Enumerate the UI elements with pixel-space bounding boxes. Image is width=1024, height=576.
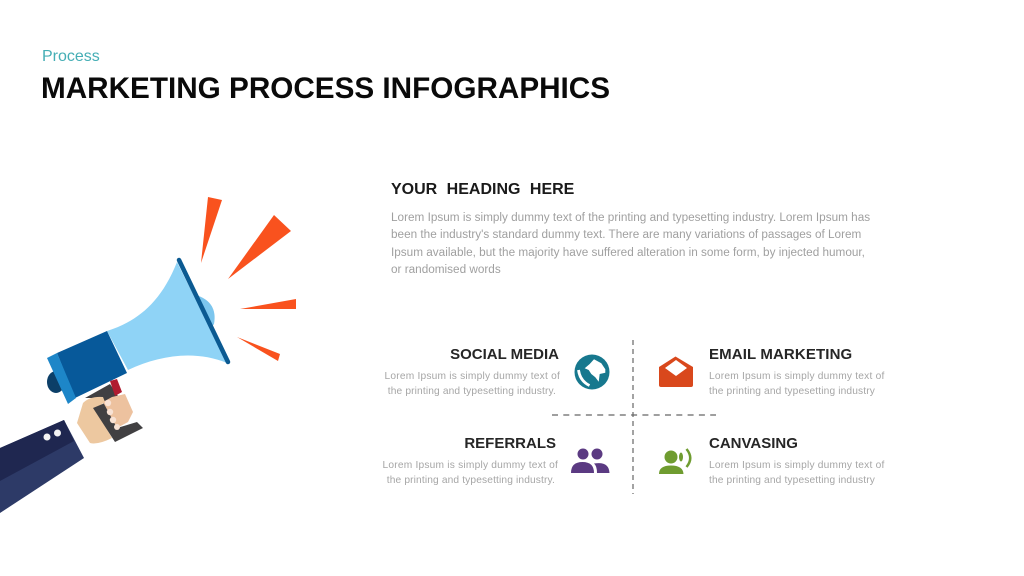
description: social media: the printing and typesetting industry. (388, 386, 556, 397)
subtitle: Process (42, 48, 100, 65)
description: email marketing: Lorem Ipsum is simply dummy text of (709, 371, 884, 382)
body paragraph: been the industry's standard dummy text. There are many variations of passages of Lorem (391, 228, 861, 241)
description: referrals: Lorem Ipsum is simply dummy text of (382, 460, 558, 471)
megaphone (47, 260, 228, 404)
heading: social media: SOCIAL MEDIA (450, 346, 559, 363)
sound spikes (201, 197, 296, 361)
item: canvasing (709, 435, 884, 486)
description: canvasing: the printing and typesetting industry (709, 475, 875, 486)
heading: referrals: REFERRALS (464, 435, 556, 452)
body paragraph: Lorem Ipsum is simply dummy text of the printing and typesetting industry. Lorem Ipsum has (391, 211, 870, 224)
illustration: hand holding megaphone (0, 197, 296, 513)
description: social media (384, 371, 560, 397)
title: MARKETING PROCESS INFOGRAPHICS (41, 72, 610, 105)
heading: email marketing: EMAIL MARKETING (709, 346, 852, 363)
icon: globe (574, 354, 610, 390)
body paragraph (391, 211, 870, 276)
description: social media: Lorem Ipsum is simply dummy text of (384, 371, 560, 382)
body paragraph: Ipsum available, but the majority have suffered alteration in some form, by injected humour, (391, 246, 865, 259)
description: canvasing (709, 460, 884, 486)
item: email marketing (709, 346, 884, 397)
icon: open envelope (659, 356, 693, 387)
icon: speaking person (659, 448, 692, 474)
icon: people (571, 448, 610, 473)
description: referrals (382, 460, 558, 486)
hand and handle (77, 379, 143, 443)
description: email marketing (709, 371, 884, 397)
heading: YOUR HEADING HERE (391, 181, 574, 198)
sleeve (0, 420, 84, 513)
item: referrals (382, 435, 558, 486)
heading: canvasing: CANVASING (709, 435, 798, 452)
description: canvasing: Lorem Ipsum is simply dummy text of (709, 460, 884, 471)
description: referrals: the printing and typesetting industry. (387, 475, 555, 486)
item: social media (384, 346, 560, 397)
description: email marketing: the printing and typesetting industry (709, 386, 875, 397)
body paragraph: or randomised words (391, 263, 501, 276)
